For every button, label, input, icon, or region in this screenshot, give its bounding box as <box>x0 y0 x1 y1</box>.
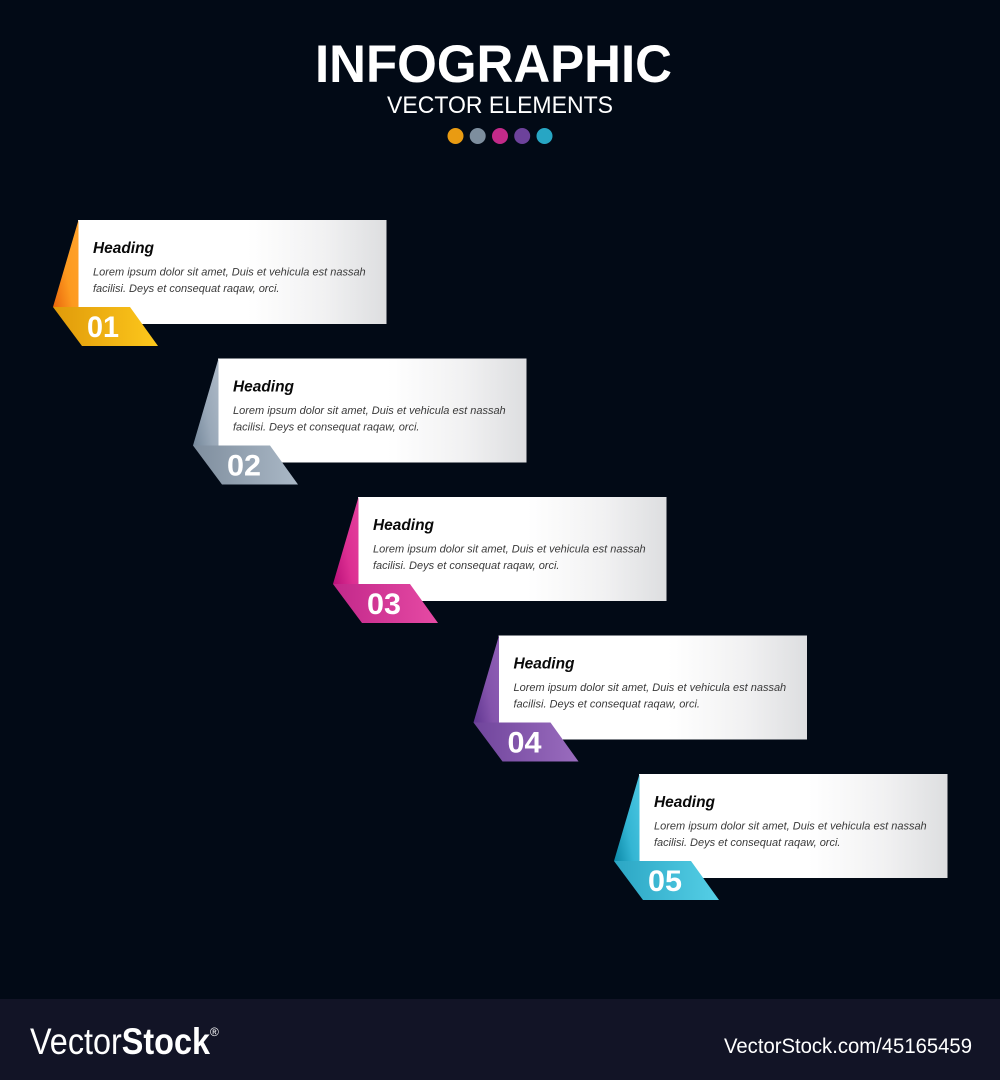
heading 04: Heading <box>514 656 575 672</box>
body 04: facilisi. Deys et consequat raqaw, orci. <box>514 698 700 710</box>
number band 02 <box>193 446 298 484</box>
heading 02: Heading <box>233 378 294 396</box>
number 02: 02 <box>227 450 261 482</box>
number band 01 <box>53 307 158 346</box>
heading 03: Heading <box>373 517 434 534</box>
flap 01 <box>53 220 78 307</box>
title: INFOGRAPHIC <box>315 35 672 94</box>
title block <box>315 35 672 144</box>
footer logo: VectorStock <box>30 1021 210 1062</box>
flap 04 <box>474 636 499 722</box>
number 01: 01 <box>87 311 119 344</box>
card 04 <box>498 636 807 740</box>
step 02 <box>193 358 526 484</box>
card 02 <box>218 358 526 462</box>
number 03: 03 <box>367 588 401 621</box>
body 04: Lorem ipsum dolor sit amet, Duis et vehicula est nassah <box>514 682 786 694</box>
body 02: Lorem ipsum dolor sit amet, Duis et vehicula est nassah <box>233 405 506 417</box>
subtitle: VECTOR ELEMENTS <box>387 92 613 119</box>
body 05: facilisi. Deys et consequat raqaw, orci. <box>654 837 840 849</box>
body 02: facilisi. Deys et consequat raqaw, orci. <box>233 422 419 434</box>
body 01: Lorem ipsum dolor sit amet, Duis et vehicula est nassah <box>93 266 366 278</box>
card 01 <box>78 220 386 324</box>
body 05: Lorem ipsum dolor sit amet, Duis et vehicula est nassah <box>654 820 927 832</box>
registered mark: ® <box>210 1025 219 1039</box>
flap 05 <box>614 774 640 861</box>
flap 02 <box>193 358 218 446</box>
footer bar <box>0 999 1000 1080</box>
flap 03 <box>333 497 358 584</box>
heading 05: Heading <box>654 794 715 811</box>
body 03: Lorem ipsum dolor sit amet, Duis et vehicula est nassah <box>373 544 646 556</box>
step 03 <box>333 497 666 623</box>
footer url: VectorStock.com/45165459 <box>724 1035 972 1058</box>
step 04 <box>474 636 807 762</box>
step 05 <box>614 774 948 900</box>
card 05 <box>639 774 948 878</box>
number 04: 04 <box>508 726 542 760</box>
colour dots <box>448 128 552 144</box>
number 05: 05 <box>648 865 682 898</box>
card 03 <box>358 497 666 601</box>
body 03: facilisi. Deys et consequat raqaw, orci. <box>373 560 559 572</box>
number band 03 <box>333 584 438 623</box>
step 01 <box>53 220 386 346</box>
body 01: facilisi. Deys et consequat raqaw, orci. <box>93 283 279 295</box>
heading 01: Heading <box>93 240 154 257</box>
number band 05 <box>614 861 719 900</box>
number band 04 <box>474 722 578 762</box>
